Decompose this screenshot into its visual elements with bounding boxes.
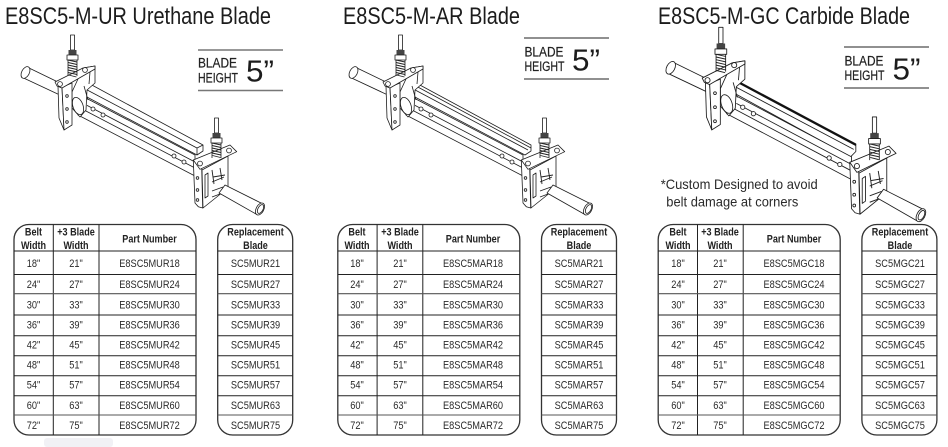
column: belt width: 42" <box>27 340 41 352</box>
column: blade width: 75" <box>713 420 727 432</box>
panel: urethane blade <box>5 3 293 435</box>
column: replacement blade: SC5MGC75 <box>875 420 925 432</box>
column: part number: E8SC5MUR30 <box>119 300 180 312</box>
column: belt width <box>21 227 46 432</box>
column: replacement blade: SC5MUR33 <box>231 300 280 312</box>
column: replacement blade: SC5MAR21 <box>555 259 604 270</box>
column: belt width: Belt <box>669 227 687 239</box>
column: blade width: 57" <box>713 380 727 392</box>
column: part number: E8SC5MGC60 <box>763 400 825 412</box>
column: belt width: Width <box>21 240 46 252</box>
diagram: AR scraper assembly <box>347 35 594 217</box>
column: belt width: 60" <box>27 400 41 412</box>
column: belt width: 36" <box>350 320 364 332</box>
blade height callout: 5” <box>572 42 600 78</box>
column: blade width: 75" <box>69 420 83 432</box>
column: blade width <box>701 227 739 432</box>
column: part number: Part Number <box>446 234 500 246</box>
column: replacement blade: SC5MGC57 <box>875 380 925 392</box>
column: blade width: 45" <box>393 340 407 352</box>
column: part number <box>119 234 180 432</box>
column: part number: E8SC5MAR54 <box>443 380 503 392</box>
column: part number <box>763 234 825 432</box>
column: replacement blade: SC5MAR51 <box>555 360 604 372</box>
column: replacement blade: SC5MAR45 <box>555 340 604 352</box>
column: part number: E8SC5MUR36 <box>119 320 180 332</box>
column: blade width: 39" <box>713 320 727 332</box>
column: part number: Part Number <box>122 234 177 246</box>
column: blade width: 27" <box>713 279 727 291</box>
column: blade width: 21" <box>713 259 727 270</box>
column: replacement blade: SC5MUR57 <box>231 380 280 392</box>
column: replacement blade: Blade <box>243 240 268 252</box>
column: belt width: 54" <box>27 380 41 392</box>
column: belt width <box>665 227 691 432</box>
column: belt width: 18" <box>671 259 685 270</box>
column: belt width: 24" <box>350 279 364 291</box>
footnote: *Custom Designed to avoid <box>661 176 818 192</box>
column: blade width: 63" <box>69 400 83 412</box>
column: replacement blade: SC5MAR27 <box>555 279 604 291</box>
column: blade width: 57" <box>69 380 83 392</box>
column: replacement blade: SC5MGC45 <box>875 340 925 352</box>
column: belt width: 48" <box>350 360 364 372</box>
footnote: belt damage at corners <box>666 194 798 210</box>
column: belt width: 24" <box>27 279 41 291</box>
column: blade width: 39" <box>69 320 83 332</box>
column: blade width: 63" <box>713 400 727 412</box>
column: replacement blade <box>872 227 929 432</box>
blade height callout: HEIGHT <box>524 59 564 74</box>
blade height callout: 5” <box>892 52 920 86</box>
smudge below first table <box>44 438 113 447</box>
column: replacement blade: SC5MUR39 <box>231 320 280 332</box>
column: part number: E8SC5MAR30 <box>443 300 503 312</box>
column: blade width: +3 Blade <box>57 227 95 239</box>
column: replacement blade <box>551 227 608 432</box>
column: blade width: 27" <box>393 279 407 291</box>
table: AR part numbers <box>338 224 616 435</box>
column: blade width: Width <box>63 240 89 252</box>
column: blade width: 27" <box>69 279 83 291</box>
column: blade width: 51" <box>713 360 727 372</box>
column: replacement blade: SC5MGC21 <box>875 259 925 270</box>
column: replacement blade: Replacement <box>227 227 284 239</box>
column: part number: E8SC5MGC42 <box>763 340 825 352</box>
column: blade width: 51" <box>393 360 407 372</box>
column: part number: E8SC5MUR72 <box>119 420 180 432</box>
column: belt width: Width <box>665 240 691 252</box>
column: part number: E8SC5MAR42 <box>443 340 503 352</box>
column: replacement blade: SC5MUR21 <box>231 259 280 270</box>
column: belt width: 54" <box>671 380 685 392</box>
blade height callout: HEIGHT <box>198 71 238 86</box>
column: replacement blade <box>227 227 284 432</box>
column: belt width: 42" <box>350 340 364 352</box>
blade height callout: 5” <box>246 54 274 89</box>
column: replacement blade: Replacement <box>872 227 929 239</box>
column: replacement blade: SC5MAR57 <box>555 380 604 392</box>
column: part number: E8SC5MAR48 <box>443 360 503 372</box>
blade height callout <box>198 50 283 90</box>
column: blade width: +3 Blade <box>701 227 739 239</box>
column: part number: E8SC5MGC24 <box>763 279 825 291</box>
column: blade width: 33" <box>393 300 407 312</box>
diagram: carbide scraper assembly <box>664 27 928 223</box>
diagram: urethane scraper assembly <box>19 35 266 217</box>
column: belt width: 30" <box>350 300 364 312</box>
column: replacement blade: SC5MUR75 <box>231 420 280 432</box>
column: replacement blade: SC5MAR33 <box>555 300 604 312</box>
column: blade width: 45" <box>69 340 83 352</box>
column: belt width: 48" <box>671 360 685 372</box>
column: blade width: Width <box>707 240 733 252</box>
column: part number: E8SC5MUR60 <box>119 400 180 412</box>
column: part number: Part Number <box>767 234 821 246</box>
column: blade width: 33" <box>69 300 83 312</box>
column: belt width: 30" <box>27 300 41 312</box>
column: blade width: +3 Blade <box>381 227 419 239</box>
column: belt width: 60" <box>671 400 685 412</box>
column: replacement blade: SC5MGC51 <box>875 360 925 372</box>
column: replacement blade: SC5MUR63 <box>231 400 280 412</box>
column: belt width: Belt <box>348 227 366 239</box>
column: belt width: Belt <box>25 227 43 239</box>
column: belt width: 72" <box>350 420 364 432</box>
column: belt width: 54" <box>350 380 364 392</box>
column: part number <box>443 234 503 432</box>
column: blade width: 21" <box>69 259 83 270</box>
column: blade width: Width <box>387 240 413 252</box>
column: part number: E8SC5MAR60 <box>443 400 503 412</box>
blade height callout <box>844 47 929 88</box>
column: replacement blade: SC5MUR51 <box>231 360 280 372</box>
column: replacement blade: Blade <box>567 240 592 252</box>
column: part number: E8SC5MAR18 <box>443 259 503 270</box>
column: belt width: 72" <box>27 420 41 432</box>
column: belt width: 42" <box>671 340 685 352</box>
column: belt width: 18" <box>350 259 364 270</box>
column: replacement blade: SC5MUR45 <box>231 340 280 352</box>
column: replacement blade: SC5MAR75 <box>555 420 604 432</box>
column: belt width: 30" <box>671 300 685 312</box>
column: replacement blade: SC5MGC39 <box>875 320 925 332</box>
column: belt width: 18" <box>27 259 41 270</box>
column: part number: E8SC5MGC36 <box>763 320 825 332</box>
column: part number: E8SC5MGC30 <box>763 300 825 312</box>
column: part number: E8SC5MAR36 <box>443 320 503 332</box>
blade height callout: HEIGHT <box>844 68 884 83</box>
column: belt width: 60" <box>350 400 364 412</box>
column: part number: E8SC5MUR48 <box>119 360 180 372</box>
column: replacement blade: SC5MGC27 <box>875 279 925 291</box>
column: part number: E8SC5MGC54 <box>763 380 825 392</box>
column: belt width <box>344 227 370 432</box>
column: part number: E8SC5MAR24 <box>443 279 503 291</box>
column: blade width: 21" <box>393 259 407 270</box>
column: part number: E8SC5MUR42 <box>119 340 180 352</box>
column: part number: E8SC5MUR24 <box>119 279 180 291</box>
panel: carbide blade <box>658 3 937 435</box>
column: part number: E8SC5MUR54 <box>119 380 180 392</box>
blade height callout: BLADE <box>198 56 237 71</box>
column: blade width: 51" <box>69 360 83 372</box>
column: blade width: 75" <box>393 420 407 432</box>
title: AR: E8SC5-M-AR Blade <box>343 3 520 30</box>
column: replacement blade: SC5MGC33 <box>875 300 925 312</box>
footnote <box>661 176 818 210</box>
column: belt width: 48" <box>27 360 41 372</box>
column: replacement blade: SC5MUR27 <box>231 279 280 291</box>
blade height callout <box>524 38 609 79</box>
column: replacement blade: SC5MGC63 <box>875 400 925 412</box>
column: part number: E8SC5MGC48 <box>763 360 825 372</box>
column: belt width: 36" <box>671 320 685 332</box>
column: blade width: 45" <box>713 340 727 352</box>
column: replacement blade: Blade <box>888 240 913 252</box>
column: part number: E8SC5MGC72 <box>763 420 825 432</box>
column: blade width <box>57 227 95 432</box>
blade height callout: BLADE <box>844 54 884 68</box>
column: blade width: 33" <box>713 300 727 312</box>
column: blade width: 39" <box>393 320 407 332</box>
table: urethane part numbers <box>14 224 293 435</box>
column: part number: E8SC5MAR72 <box>443 420 503 432</box>
column: part number: E8SC5MGC18 <box>763 259 825 270</box>
column: belt width: 72" <box>671 420 685 432</box>
column: replacement blade: SC5MAR39 <box>555 320 604 332</box>
table: carbide part numbers <box>658 224 937 435</box>
blade height callout: BLADE <box>524 44 564 60</box>
column: blade width: 57" <box>393 380 407 392</box>
panel: AR blade <box>338 3 616 435</box>
column: belt width: 24" <box>671 279 685 291</box>
column: belt width: 36" <box>27 320 41 332</box>
column: replacement blade: Replacement <box>551 227 608 239</box>
column: blade width <box>381 227 419 432</box>
column: replacement blade: SC5MAR63 <box>555 400 604 412</box>
title: urethane: E8SC5-M-UR Urethane Blade <box>5 3 271 30</box>
column: blade width: 63" <box>393 400 407 412</box>
column: belt width: Width <box>344 240 370 252</box>
column: part number: E8SC5MUR18 <box>119 259 180 270</box>
